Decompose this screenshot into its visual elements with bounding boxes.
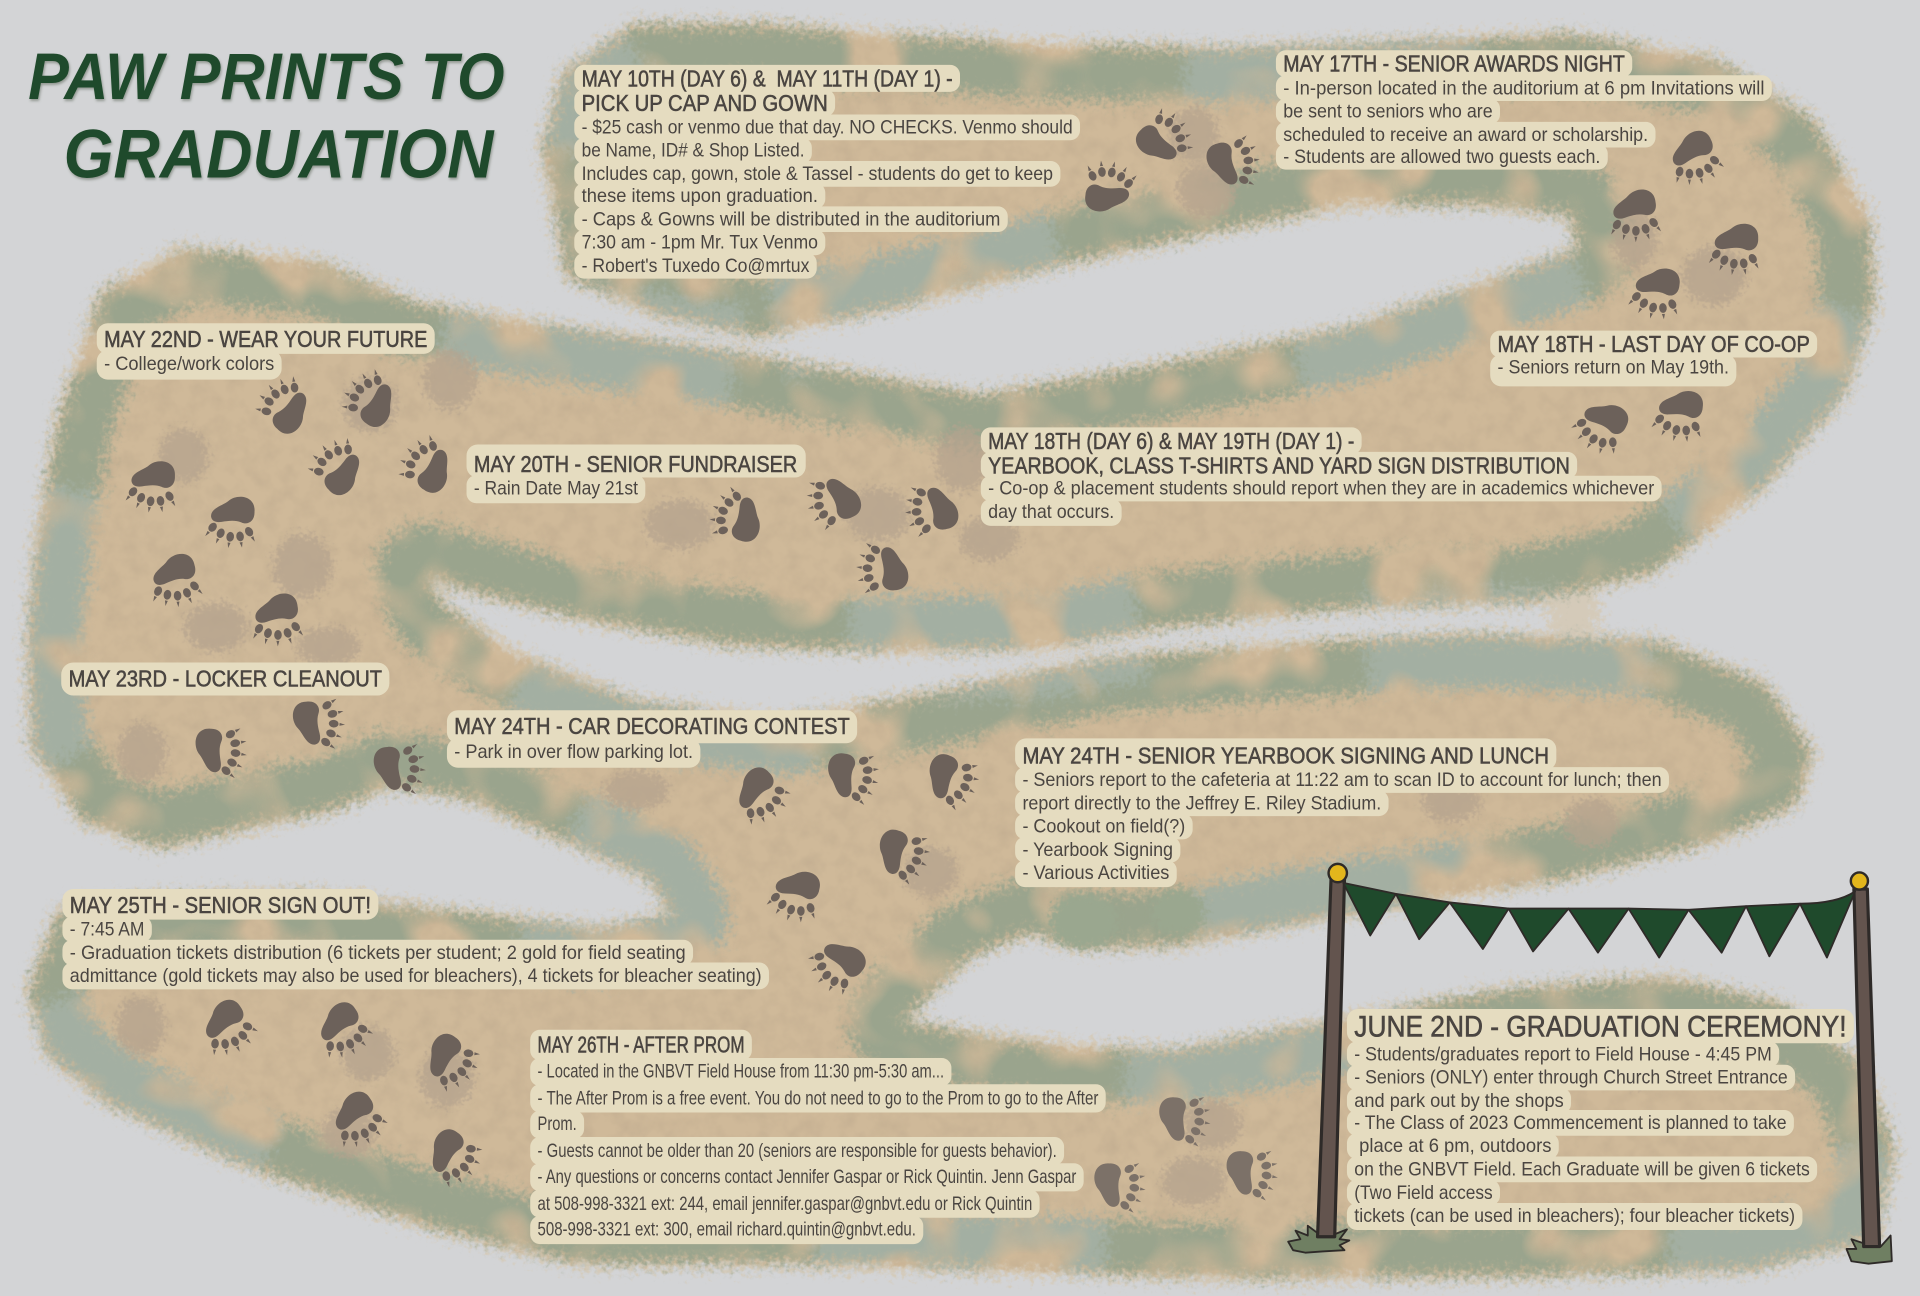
details: - In-person located in the auditorium at 6 pm Invitations will [1283, 78, 1764, 99]
details: - Park in over flow parking lot. [454, 742, 693, 763]
heading: MAY 17TH - SENIOR AWARDS NIGHT [1283, 51, 1625, 77]
details: scheduled to receive an award or scholarship. [1283, 125, 1648, 146]
details: report directly to the Jeffrey E. Riley Stadium. [1022, 793, 1381, 814]
title: PAW PRINTS TO [28, 40, 504, 114]
details: - Seniors report to the cafeteria at 11:22 am to scan ID to account for lunch; then [1022, 770, 1662, 791]
heading: MAY 18TH (DAY 6) & MAY 19TH (DAY 1) - [988, 428, 1354, 454]
details: and park out by the shops [1354, 1091, 1564, 1112]
heading: MAY 26TH - AFTER PROM [538, 1031, 744, 1057]
details: - The After Prom is a free event. You do not need to go to the Prom to go to the After [538, 1088, 1098, 1109]
details: Prom. [538, 1114, 577, 1135]
details: 7:30 am - 1pm Mr. Tux Venmo [582, 233, 818, 254]
label background [467, 444, 806, 503]
details: on the GNBVT Field. Each Graduate will be given 6 tickets [1354, 1160, 1810, 1181]
details: - Seniors return on May 19th. [1498, 357, 1729, 378]
event: June 2nd graduation ceremony [1347, 1009, 1854, 1230]
label background [1490, 331, 1817, 386]
details: at 508-998-3321 ext: 244, email jennifer.gaspar@gnbvt.edu or Rick Quintin [538, 1194, 1032, 1215]
details: place at 6 pm, outdoors [1359, 1136, 1551, 1157]
label background [61, 662, 389, 696]
details [988, 479, 1654, 523]
label background [981, 427, 1662, 526]
details: - Located in the GNBVT Field House from 11:30 pm-5:30 am... [538, 1062, 944, 1083]
bunting flags [1343, 883, 1855, 958]
label background [574, 65, 1080, 279]
heading [988, 428, 1570, 478]
details: - Caps & Gowns will be distributed in the auditorium [582, 209, 1000, 230]
details: - Rain Date May 21st [474, 479, 639, 500]
heading: MAY 22ND - WEAR YOUR FUTURE [104, 326, 427, 352]
event: May 24th car decorating contest [447, 710, 857, 768]
heading: PICK UP CAP AND GOWN [582, 90, 828, 116]
details: - Students/graduates report to Field House - 4:45 PM [1354, 1044, 1772, 1065]
details [1022, 770, 1662, 884]
heading: MAY 10TH (DAY 6) & MAY 11TH (DAY 1) - [582, 65, 953, 91]
event: May 20th senior fundraiser [467, 444, 806, 503]
right pole [1854, 889, 1880, 1247]
details: these items upon graduation. [582, 186, 818, 207]
label background [1015, 738, 1669, 887]
details: - Co-op & placement students should report when they are in academics whichever [988, 479, 1654, 500]
details: admittance (gold tickets may also be used for bleachers), 4 tickets for bleacher seating) [70, 966, 762, 987]
paw prints: trail section four [193, 994, 1280, 1214]
details: - 7:45 AM [70, 920, 144, 941]
details: Includes cap, gown, stole & Tassel - students do get to keep [582, 164, 1053, 185]
event: May 24th senior yearbook signing and lunch [1015, 738, 1669, 887]
details: - College/work colors [104, 354, 274, 375]
heading: MAY 18TH - LAST DAY OF CO-OP [1498, 331, 1810, 357]
label background [1347, 1009, 1854, 1230]
event: May 18th last day of co-op [1490, 331, 1817, 386]
details: - Guests cannot be older than 20 (seniors are responsible for guests behavior). [538, 1141, 1057, 1162]
details: - Any questions or concerns contact Jennifer Gaspar or Rick Quintin. Jenn Gaspar [538, 1167, 1076, 1188]
details: - Various Activities [1022, 863, 1169, 884]
details: - Seniors (ONLY) enter through Church Street Entrance [1354, 1068, 1788, 1089]
event: May 18th and 19th yearbook distribution [981, 427, 1662, 526]
right grass tuft [1847, 1236, 1892, 1264]
label background [97, 323, 435, 380]
label background [62, 889, 769, 989]
label background [447, 710, 857, 768]
details: be sent to seniors who are [1283, 102, 1493, 123]
finish line banner [1288, 864, 1892, 1264]
paw prints: trail section two [125, 363, 961, 648]
details: - Students are allowed two guests each. [1283, 147, 1600, 168]
trail: green blobs [1049, 890, 1205, 948]
heading: MAY 25TH - SENIOR SIGN OUT! [70, 892, 371, 918]
left pole knob [1329, 864, 1347, 882]
details: (Two Field access [1354, 1183, 1493, 1204]
label background [1276, 50, 1772, 170]
details: - Yearbook Signing [1022, 840, 1173, 861]
details [1354, 1044, 1810, 1227]
details: be Name, ID# & Shop Listed. [582, 141, 804, 162]
event: May 25th senior sign out [62, 889, 769, 989]
details: tickets (can be used in bleachers); four bleacher tickets) [1354, 1206, 1795, 1227]
heading: YEARBOOK, CLASS T-SHIRTS AND YARD SIGN DISTRIBUTION [988, 452, 1570, 478]
event: May 23rd locker cleanout [61, 662, 389, 696]
details [538, 1062, 1098, 1241]
left pole [1318, 879, 1344, 1237]
title [28, 40, 504, 193]
details [582, 117, 1073, 277]
details: - Cookout on field(?) [1022, 817, 1185, 838]
details: - The Class of 2023 Commencement is planned to take [1354, 1113, 1787, 1134]
details: - Robert's Tuxedo Co@mrtux [582, 256, 810, 277]
event: May 26th after prom [530, 1030, 1106, 1244]
details: day that occurs. [988, 502, 1114, 523]
title: GRADUATION [64, 116, 495, 193]
right pole knob [1851, 872, 1868, 890]
paw prints: trail section one [1080, 103, 1762, 461]
event: May 22nd wear your future [97, 323, 435, 380]
heading: MAY 23RD - LOCKER CLEANOUT [69, 665, 382, 691]
details: 508-998-3321 ext: 300, email richard.quintin@gnbvt.edu. [538, 1220, 916, 1241]
event: May 17th senior awards night [1276, 50, 1772, 170]
trail: darker dirt patches [116, 108, 1746, 1206]
paw prints: trail section three [193, 699, 986, 1001]
heading [582, 65, 953, 116]
details [70, 920, 762, 987]
heading: MAY 24TH - CAR DECORATING CONTEST [454, 713, 850, 739]
event: May 10th and 11th cap and gown [574, 65, 1080, 279]
details: - $25 cash or venmo due that day. NO CHECKS. Venmo should [582, 117, 1073, 138]
left grass tuft [1288, 1224, 1349, 1253]
label background [530, 1030, 1106, 1244]
details: - Graduation tickets distribution (6 tickets per student; 2 gold for field seating [70, 943, 686, 964]
heading: JUNE 2ND - GRADUATION CEREMONY! [1354, 1011, 1847, 1044]
heading: MAY 24TH - SENIOR YEARBOOK SIGNING AND LUNCH [1022, 742, 1549, 768]
heading: MAY 20TH - SENIOR FUNDRAISER [474, 451, 797, 477]
details [1283, 78, 1764, 168]
